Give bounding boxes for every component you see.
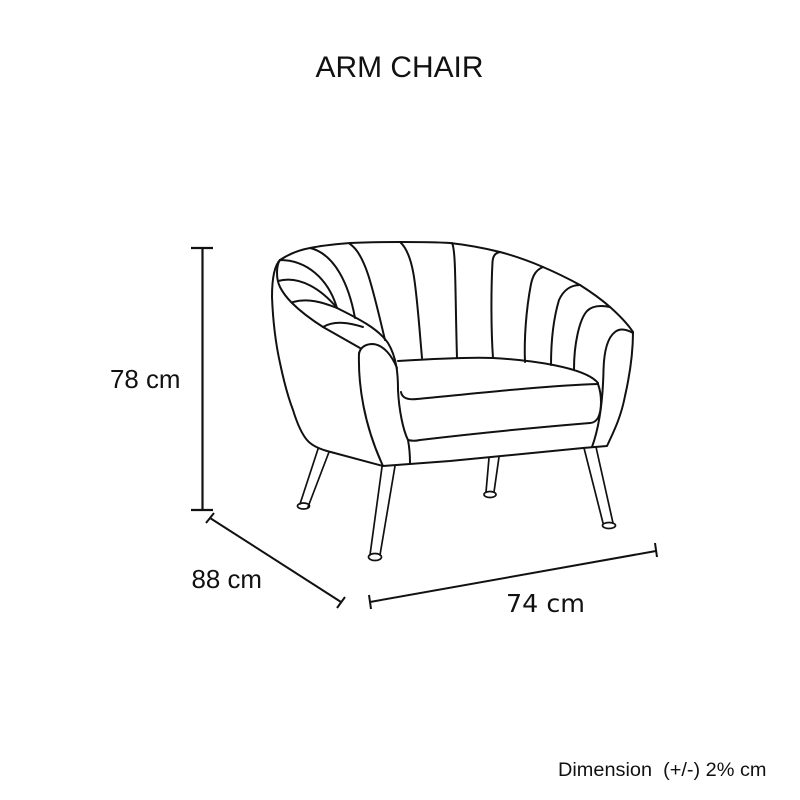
front left arm	[359, 344, 397, 368]
left arm channels	[280, 260, 337, 308]
seat cushion front	[408, 384, 601, 441]
left inner arm edge	[277, 260, 360, 348]
back channels	[310, 248, 355, 318]
inner ridge to front	[337, 308, 410, 463]
chair back top rail	[280, 242, 633, 332]
seat cushion top	[398, 358, 598, 383]
width dimension line: 74 cm	[369, 543, 657, 609]
arm chair line drawing	[272, 242, 633, 560]
height dimension line: 78 cm	[191, 248, 213, 510]
title: ARM CHAIR	[316, 51, 484, 84]
label: 78 cm: 78 cm	[110, 364, 180, 394]
dimension tolerance note: Dimension (+/-) 2% cm	[558, 759, 766, 781]
label: 88 cm: 88 cm	[192, 564, 262, 594]
front right arm	[592, 329, 633, 447]
chair legs	[298, 447, 616, 560]
label: 74 cm: 74 cm	[506, 589, 585, 618]
depth dimension line: 88 cm	[206, 513, 345, 608]
chair outer body	[272, 260, 633, 466]
